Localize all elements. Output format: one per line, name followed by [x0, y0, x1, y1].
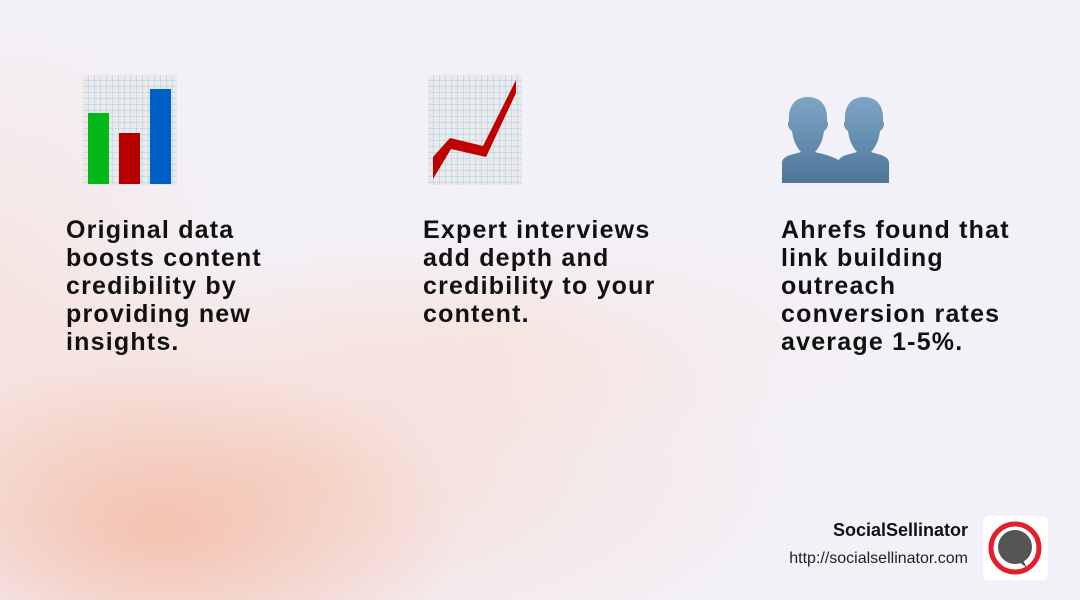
icon: bar chart: [83, 75, 177, 185]
logo: [983, 516, 1048, 580]
text: original data: Original data boosts content credibility by providing new insights.: [66, 216, 262, 356]
icon: people: [782, 97, 889, 183]
text: ahrefs: Ahrefs found that link building outreach conversion rates average 1-5%.: [781, 216, 1010, 356]
text: expert interviews: Expert interviews add depth and credibility to your content.: [423, 216, 656, 328]
brand name: SocialSellinator: [833, 520, 968, 540]
icon: line chart: [428, 75, 522, 185]
brand url: http://socialsellinator.com: [789, 550, 968, 567]
